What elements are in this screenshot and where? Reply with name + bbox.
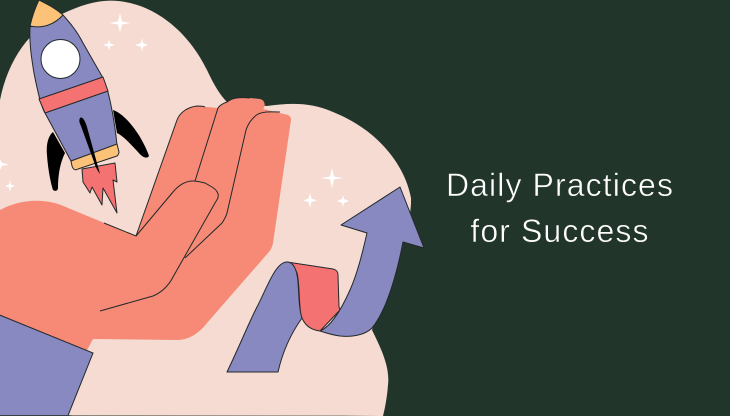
sparkles right [303,168,349,208]
arrow front [320,187,424,336]
rocket base [71,144,119,170]
ribbon back [287,262,340,331]
hand finger outlines [100,98,280,311]
arrow ribbon [227,187,424,372]
background blob [0,1,411,416]
rocket [30,0,149,213]
title [446,167,674,249]
rocket body [30,15,117,161]
rocket window [41,40,80,78]
rocket nose [30,0,63,27]
rocket nozzle [79,117,100,174]
rocket flame [82,163,117,213]
bottom edge [0,415,380,416]
hand [0,98,291,352]
sparkles top [0,13,148,192]
title: Daily Practices [446,167,674,203]
ribbon left [227,262,302,372]
title: for Success [470,213,650,249]
rocket band [39,77,108,113]
sleeve [0,314,93,416]
rocket fins [47,110,149,191]
